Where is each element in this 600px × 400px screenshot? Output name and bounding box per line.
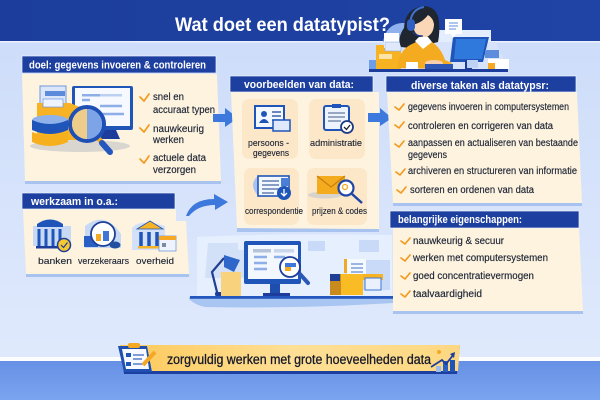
card: persoonsgegevens: persoons - xyxy=(248,138,289,148)
card: persoonsgegevens xyxy=(242,99,298,159)
illustration: desk scene xyxy=(189,234,393,308)
card: administratie xyxy=(309,99,365,159)
heading: werkzaam xyxy=(22,193,175,209)
arrow: curved xyxy=(186,194,228,216)
icon: data and magnifier xyxy=(30,86,133,152)
bottom band xyxy=(0,357,600,400)
icon: rising chart xyxy=(431,350,455,372)
heading: diverse taken xyxy=(386,76,576,92)
panel: voorbeelden xyxy=(230,76,379,232)
face xyxy=(412,15,434,37)
icon: clipboard xyxy=(118,343,155,372)
heading: voorbeelden xyxy=(230,76,373,92)
label: banken: banken xyxy=(38,256,72,266)
card: correspondentie xyxy=(244,168,303,225)
arrow: doel to voorbeelden xyxy=(213,108,238,127)
list: taken: aanpassen en actualiseren van bestaande xyxy=(408,138,578,149)
panel: diverse taken xyxy=(386,76,582,206)
papers xyxy=(221,272,241,296)
card: correspondentie: correspondentie xyxy=(245,206,303,216)
card: administratie: administratie xyxy=(310,138,362,148)
shelf xyxy=(189,297,393,308)
sweater xyxy=(397,41,452,69)
list: eigenschappen: werken met computersystemen xyxy=(412,253,548,264)
label: overheid: overheid xyxy=(136,256,174,266)
monitor xyxy=(450,37,489,62)
headset xyxy=(410,7,424,24)
panel: doel xyxy=(22,56,221,184)
list: doel: nauwkeurig xyxy=(153,124,204,135)
heading: doel: doel: gegevens invoeren & controleren xyxy=(29,60,206,72)
list: taken: sorteren en ordenen van data xyxy=(410,185,534,196)
hair xyxy=(400,6,439,48)
list: eigenschappen: taalvaardigheid xyxy=(413,289,482,300)
box xyxy=(344,259,353,273)
lamp xyxy=(212,258,224,296)
icon: banken xyxy=(33,220,71,252)
card: prijzen en codes: prijzen & codes xyxy=(312,206,367,216)
list: doel: snel en xyxy=(153,92,184,103)
list: taken: controleren en corrigeren van data xyxy=(408,121,553,132)
heading: eigenschappen: belangrijke eigenschappen: xyxy=(398,214,522,226)
heading: eigenschappen xyxy=(390,211,579,228)
magnifier xyxy=(299,273,308,283)
heading: diverse taken: diverse taken als datatypsr: xyxy=(411,80,549,92)
icon: verzekeraars xyxy=(84,220,121,248)
icon: overheid xyxy=(132,221,176,251)
list: doel: actuele data xyxy=(153,153,206,164)
header band xyxy=(0,0,600,42)
list: eigenschappen: nauwkeurig & secuur xyxy=(413,236,505,247)
list: doel xyxy=(140,92,215,176)
banner xyxy=(118,343,460,374)
list: eigenschappen xyxy=(401,236,548,300)
list: doel: accuraat typen xyxy=(153,105,215,116)
panel: eigenschappen xyxy=(390,211,583,314)
illustration: typist at desk xyxy=(369,6,509,72)
list: doel: werken xyxy=(152,135,184,146)
speech bubble xyxy=(445,19,462,38)
monitor xyxy=(244,241,301,284)
list: taken xyxy=(395,102,578,196)
title: Wat doet een datatypist? xyxy=(175,14,390,36)
heading: werkzaam: werkzaam in o.a.: xyxy=(30,196,118,208)
arrow: voorbeelden to taken xyxy=(368,108,392,126)
heading: voorbeelden: voorbeelden van data: xyxy=(244,79,354,91)
list: taken: gegevens invoeren in computersystemen xyxy=(408,102,569,113)
list: taken: gegevens xyxy=(408,150,447,161)
heading: doel xyxy=(22,56,216,73)
card: persoonsgegevens: gegevens xyxy=(253,148,289,158)
list: doel: verzorgen xyxy=(153,165,196,176)
panel: werkzaam xyxy=(22,193,189,277)
banner text: zorgvuldig werken met grote hoeveelheden data xyxy=(167,352,431,367)
list: taken: archiveren en structureren van informatie xyxy=(408,166,577,177)
list: eigenschappen: goed concentratievermogen xyxy=(413,271,534,282)
card: prijzen en codes xyxy=(307,168,367,225)
label: verzekeraars: verzekeraars xyxy=(78,256,129,266)
desk xyxy=(369,69,508,72)
